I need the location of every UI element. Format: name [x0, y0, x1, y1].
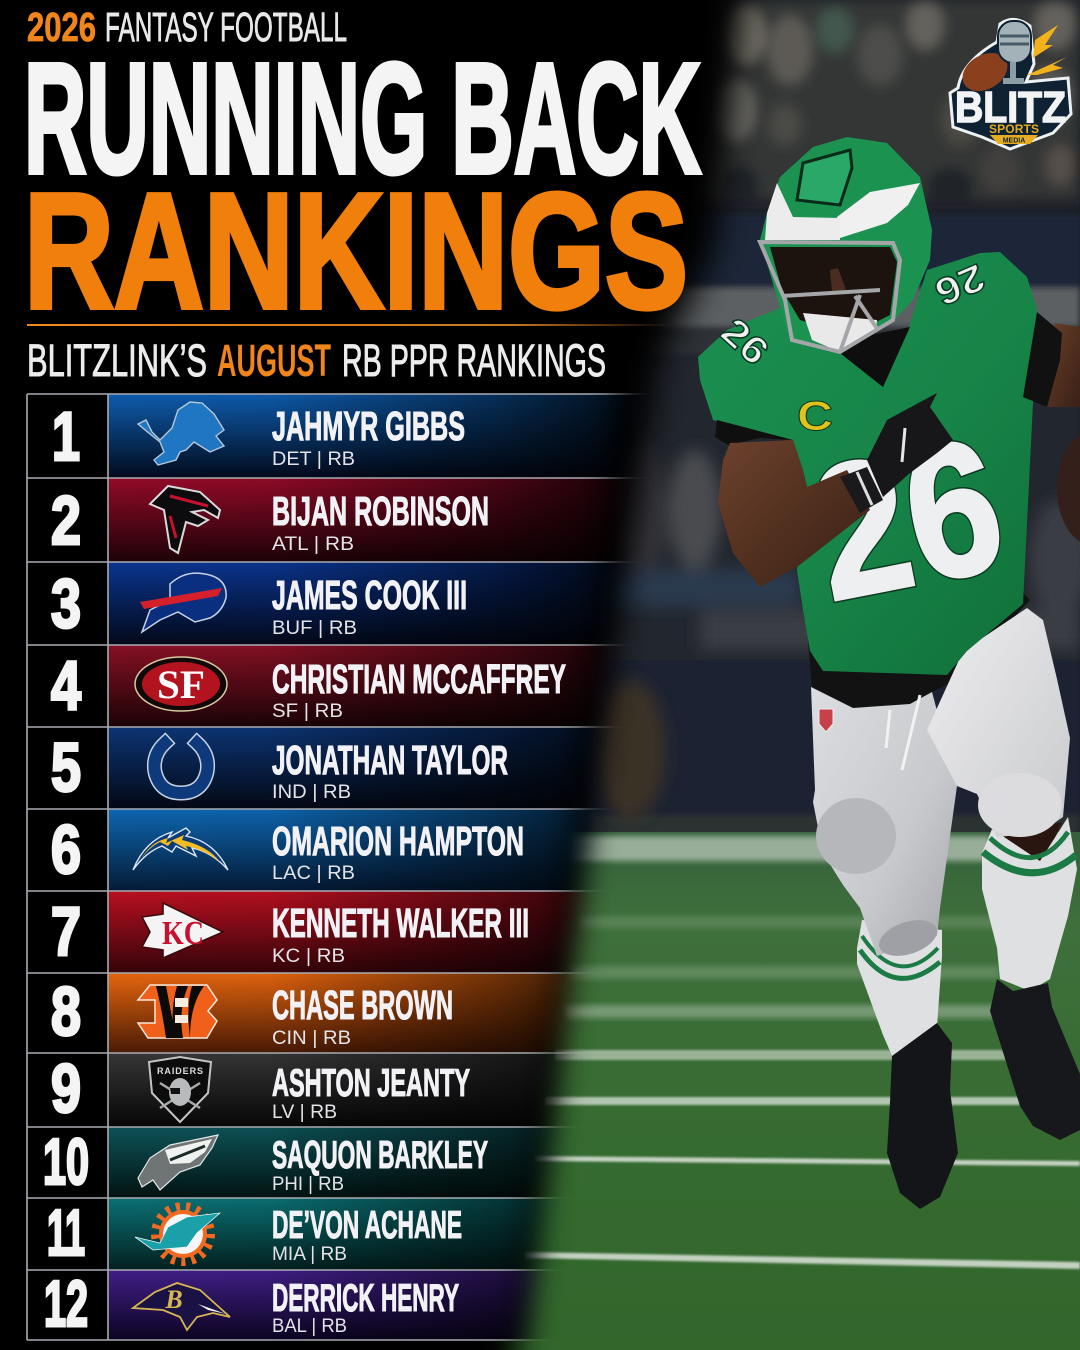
team and position: KC | RB — [272, 946, 345, 967]
rank number: 9 — [51, 1050, 81, 1127]
row 12: Derrick Henry — [44, 1267, 459, 1340]
icon: microphone — [998, 21, 1031, 81]
icon: Eagles logo — [138, 1135, 218, 1190]
icon: Raiders logo — [149, 1057, 211, 1122]
player: running back number 26 — [698, 137, 1080, 1209]
player name: JAMES COOK III — [272, 572, 467, 618]
icon: Chargers logo — [133, 828, 228, 870]
player name: CHRISTIAN MCCAFFREY — [272, 656, 566, 702]
rank number: 11 — [47, 1196, 85, 1269]
row 7: Kenneth Walker III — [51, 893, 529, 970]
icon: football — [956, 45, 1014, 99]
helmet wing — [837, 183, 920, 238]
kicker: 2026 fantasy football: 2026 — [27, 4, 96, 50]
rank number: 6 — [51, 811, 81, 888]
icon: Raiders logo: RAIDERS — [157, 1066, 203, 1076]
sports media label: MEDIA — [1003, 138, 1025, 144]
wristband and black glove — [840, 393, 953, 513]
black arm sleeve — [1023, 312, 1062, 407]
row 5: Jonathan Taylor — [51, 729, 508, 806]
rank number: 4 — [51, 647, 81, 724]
row 8: Chase Brown — [51, 973, 453, 1050]
team and position: MIA | RB — [272, 1244, 347, 1265]
left black panel — [0, 0, 745, 1350]
wordmark: BLITZ — [955, 83, 1066, 132]
row 4: Christian McCaffrey — [51, 647, 566, 724]
captain patch: C — [797, 392, 833, 439]
row 1: Jahmyr Gibbs — [52, 398, 465, 475]
icon: Lions logo — [138, 402, 224, 465]
subtitle: RB PPR RANKINGS — [342, 335, 606, 386]
title: rankings: RANKINGS — [24, 160, 688, 342]
badge outline — [950, 19, 1071, 149]
row 10: Saquon Barkley — [43, 1125, 488, 1198]
team and position: IND | RB — [272, 782, 351, 803]
icon: Bengals logo — [138, 985, 217, 1038]
upper deck bands — [590, 214, 1080, 835]
white chin guard — [803, 313, 877, 352]
face opening — [770, 247, 897, 335]
black undershirt — [808, 590, 1030, 708]
rank number: 3 — [51, 565, 81, 642]
rank number: 12 — [44, 1267, 88, 1340]
shoulder numbers — [713, 255, 991, 374]
sports media label — [989, 122, 1039, 144]
rank number: 8 — [51, 973, 81, 1050]
chest number: 26 — [797, 398, 1018, 641]
team and position: CIN | RB — [272, 1028, 351, 1049]
subtitle: AUGUST — [217, 335, 331, 386]
grey facemask — [760, 242, 900, 352]
kicker: 2026 fantasy football: FANTASY FOOTBALL — [105, 4, 347, 50]
kicker: 2026 fantasy football — [27, 4, 347, 50]
subtitle — [27, 335, 606, 386]
row 2: Bijan Robinson — [51, 482, 489, 559]
row 9: Ashton Jeanty — [51, 1050, 470, 1127]
icon: Chiefs logo — [142, 903, 223, 958]
grass field — [400, 832, 1080, 1350]
icon: Ravens logo: B — [164, 1285, 183, 1314]
icon: Bills logo — [140, 573, 226, 632]
NFL shield — [819, 709, 833, 732]
team and position: LAC | RB — [272, 863, 355, 884]
team and position: LV | RB — [272, 1102, 337, 1123]
row 3: James Cook III — [51, 565, 467, 642]
green jersey — [698, 252, 1037, 675]
icon: 49ers logo — [135, 657, 227, 711]
helmet — [760, 137, 932, 352]
player name: ASHTON JEANTY — [272, 1062, 470, 1105]
yard lines — [525, 836, 1080, 1269]
team and position: ATL | RB — [272, 534, 354, 555]
blurred sideline figures — [594, 440, 1080, 820]
player name: OMARION HAMPTON — [272, 818, 524, 864]
left pant leg — [811, 687, 957, 956]
rank number: 1 — [52, 398, 80, 475]
team and position: PHI | RB — [272, 1174, 344, 1195]
row 6: Omarion Hampton — [51, 811, 524, 888]
player name: DERRICK HENRY — [272, 1277, 459, 1320]
row 11: De'Von Achane — [47, 1196, 462, 1269]
Blitz Sports Media logo — [950, 19, 1071, 149]
player name: BIJAN ROBINSON — [272, 488, 489, 534]
right cleat — [990, 979, 1080, 1140]
far arm — [1045, 323, 1080, 407]
sports media label: SPORTS — [989, 122, 1039, 136]
icon: lightning bolts — [1027, 25, 1067, 75]
player name: KENNETH WALKER III — [272, 900, 529, 946]
player name: CHASE BROWN — [272, 982, 453, 1028]
blurred crowd — [680, 0, 1080, 216]
rank number: 5 — [51, 729, 81, 806]
player name: DE’VON ACHANE — [272, 1204, 462, 1247]
team and position: BAL | RB — [272, 1316, 347, 1337]
icon: Colts logo — [154, 743, 208, 793]
icon: Dolphins logo — [135, 1207, 220, 1261]
muscular near arm — [718, 440, 870, 587]
shoulder numbers: 26 — [928, 255, 991, 313]
left cleat — [887, 1023, 958, 1209]
stadium background scene — [400, 0, 1080, 1350]
player name: SAQUON BARKLEY — [272, 1134, 488, 1177]
knee and shin pads — [816, 798, 896, 874]
right thigh — [927, 608, 1070, 837]
rank number: 10 — [43, 1125, 89, 1198]
icon: Falcons logo — [150, 486, 220, 553]
team and position: BUF | RB — [272, 618, 357, 639]
ranking table rows — [27, 394, 650, 1340]
team and position: DET | RB — [272, 449, 355, 470]
orange divider rule — [27, 324, 672, 326]
left lower leg and sock — [857, 920, 942, 1062]
team and position: SF | RB — [272, 701, 343, 722]
chest number: 26 — [797, 398, 1018, 641]
icon: Chiefs logo: KC — [162, 915, 204, 952]
rank number: 7 — [51, 893, 81, 970]
rank number: 2 — [51, 482, 81, 559]
right lower leg and sock — [982, 817, 1077, 991]
player name: JAHMYR GIBBS — [272, 403, 465, 449]
subtitle: BLITZLINK’S — [27, 335, 207, 386]
football — [1057, 432, 1080, 544]
icon: Ravens logo — [133, 1283, 230, 1330]
waist drawstrings — [886, 695, 920, 770]
shoulder numbers: 26 — [713, 310, 776, 374]
neck undershirt — [840, 327, 910, 387]
icon: 49ers logo: SF — [157, 662, 205, 707]
player name: JONATHAN TAYLOR — [272, 737, 508, 783]
